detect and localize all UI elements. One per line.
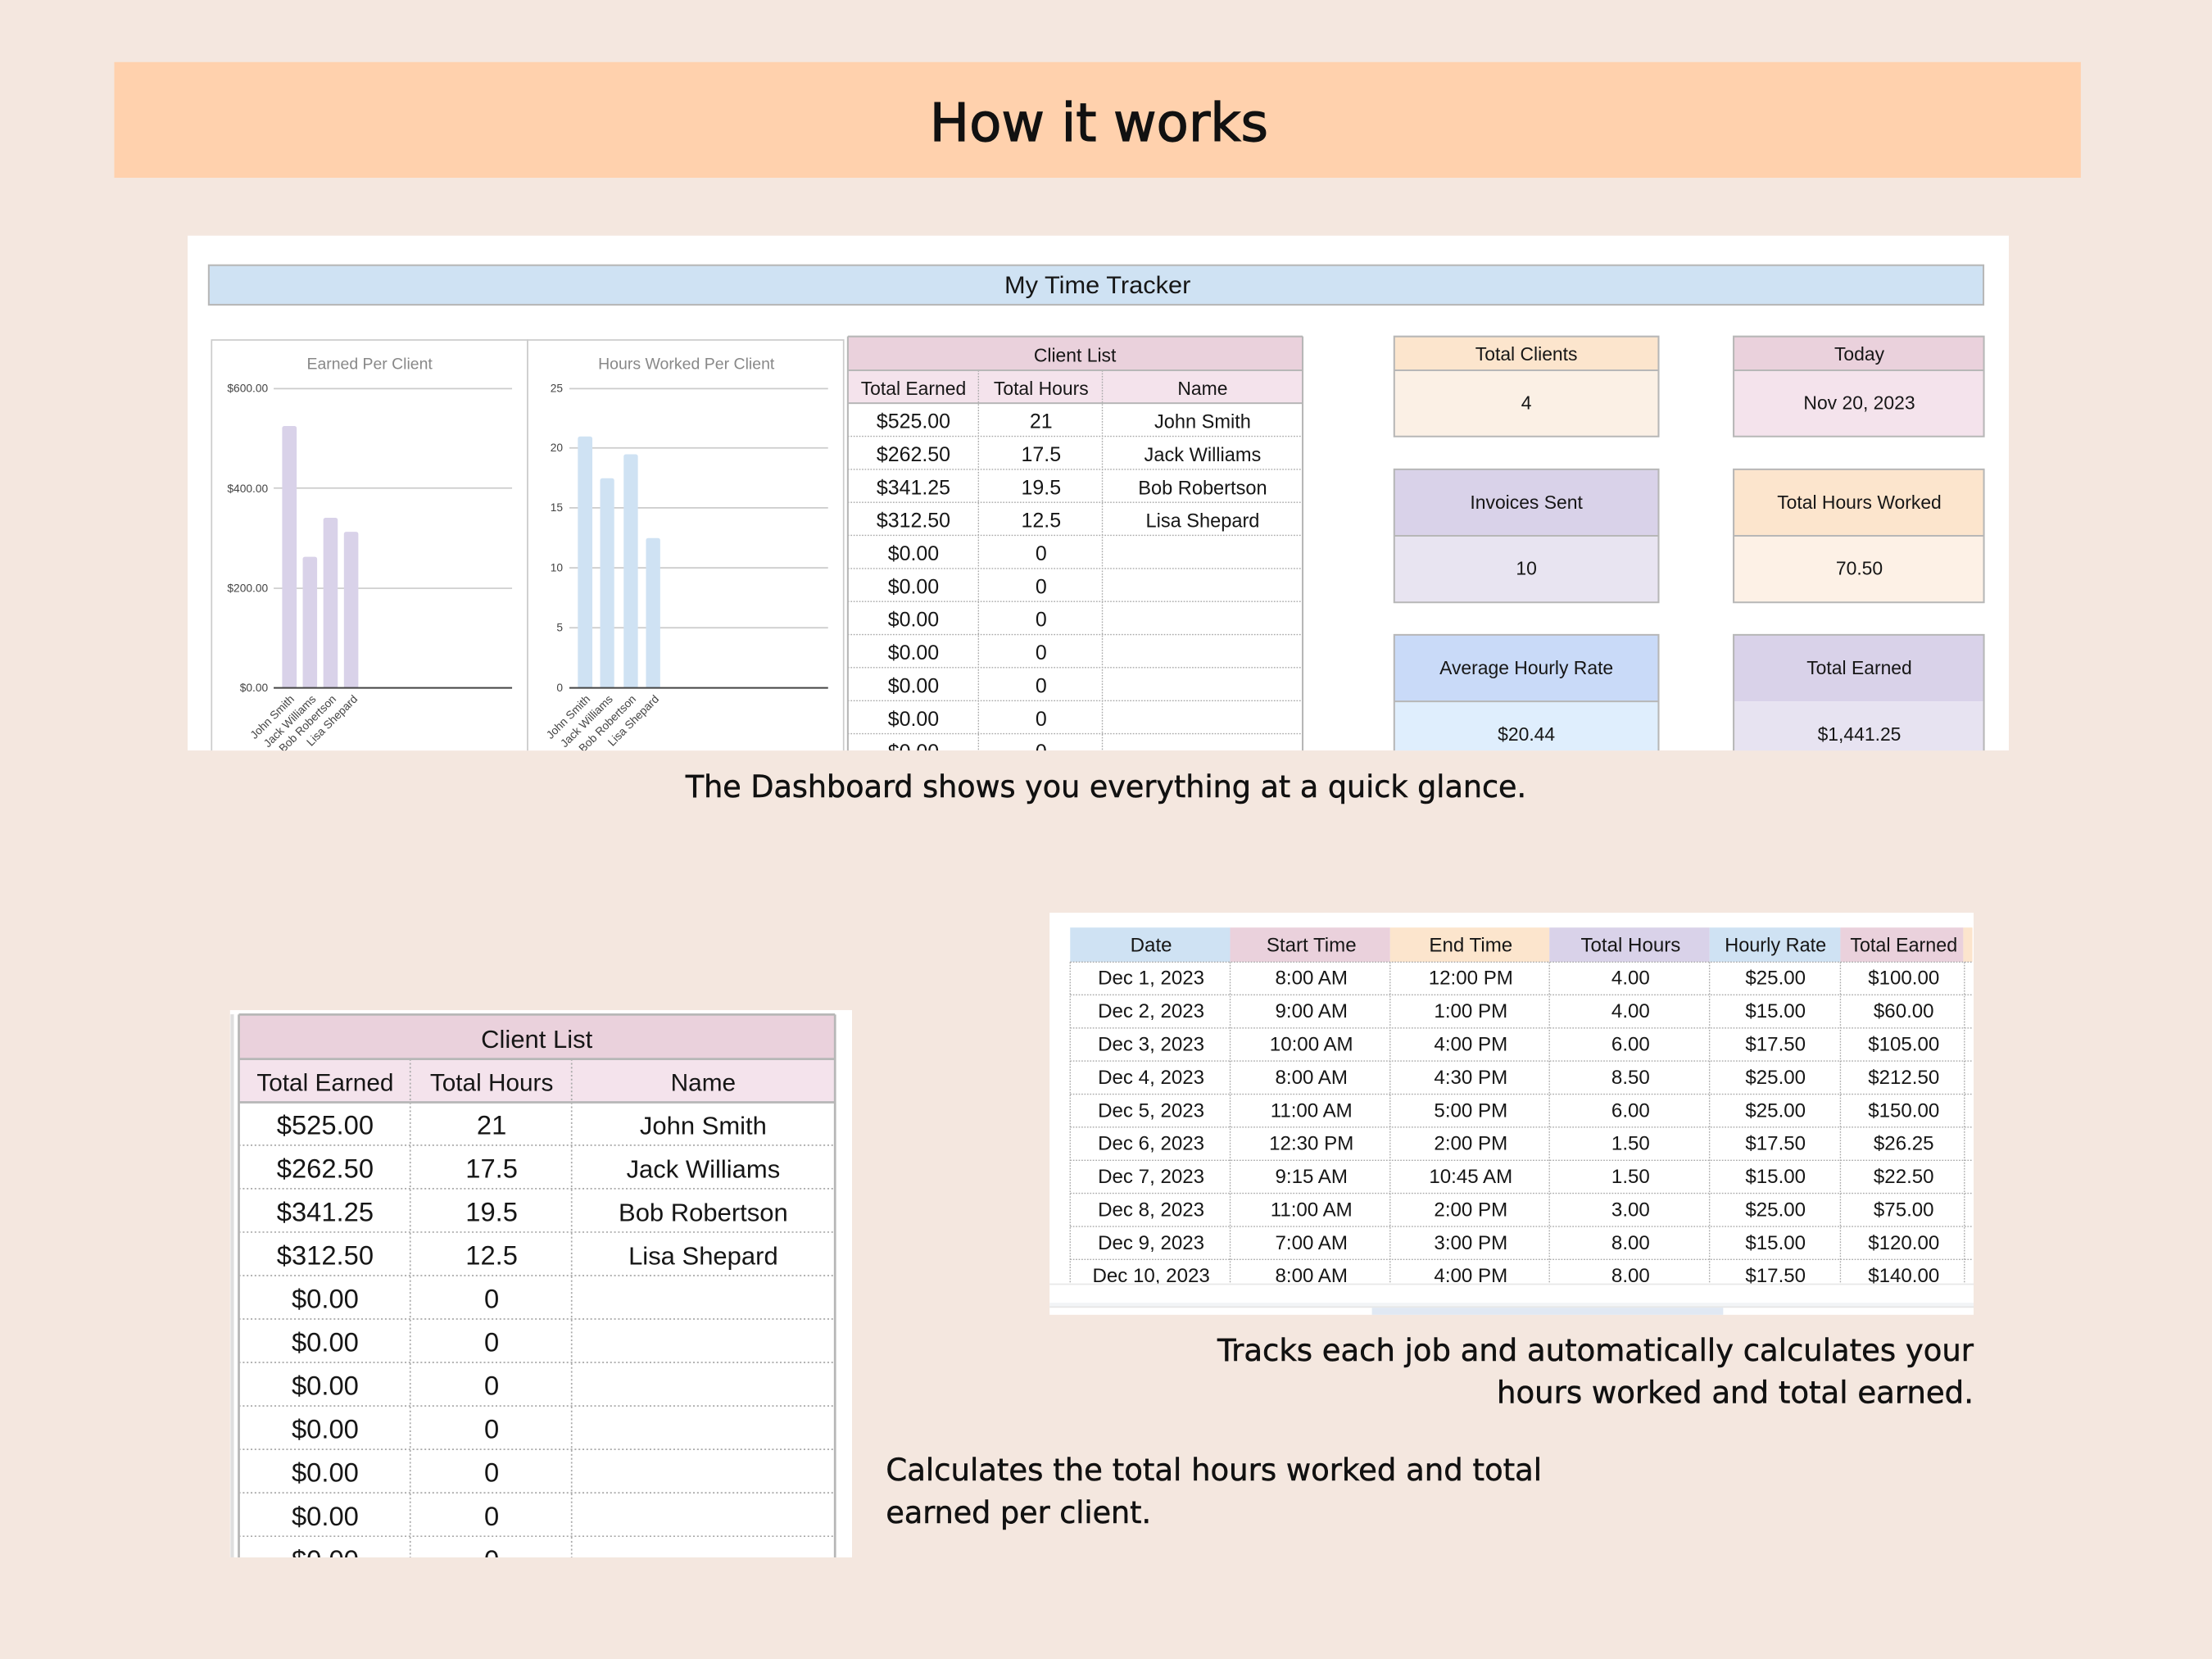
table: job log: Total Hours — [1580, 935, 1680, 957]
table: dashboard client list: $0.00 — [888, 741, 939, 764]
stat card: today: Today — [1834, 343, 1885, 365]
bar chart: earned per client: $600.00 — [227, 383, 269, 395]
table: dashboard client list: Jack Williams — [1145, 444, 1261, 465]
table: job log: $120.00 — [1868, 1232, 1939, 1254]
stat card: total clients — [1394, 337, 1658, 437]
table: job log: $75.00 — [1874, 1199, 1934, 1221]
table: job log: 2:00 PM — [1434, 1199, 1507, 1221]
panel: client list screenshot — [230, 1010, 852, 1575]
bar chart: earned per client: Earned Per Client — [307, 355, 433, 373]
table: dashboard client list: $525.00 — [877, 410, 950, 433]
bar chart: hours worked per client: 20 — [551, 442, 563, 454]
table: dashboard client list: $312.50 — [877, 510, 950, 533]
table: client list: 0 — [484, 1457, 499, 1488]
table: client list: 0 — [484, 1414, 499, 1444]
table: dashboard client list: John Smith — [1154, 411, 1251, 433]
table: client list: 17.5 — [465, 1153, 518, 1183]
table: client list: John Smith — [640, 1111, 767, 1140]
bar chart: hours worked per client — [528, 340, 844, 764]
table: job log: 3.00 — [1611, 1199, 1650, 1221]
table: client list: Bob Robertson — [619, 1199, 788, 1227]
table: dashboard client list: Lisa Shepard — [1145, 510, 1259, 532]
table: client list: $262.50 — [277, 1153, 374, 1183]
panel: time log screenshot — [1049, 913, 1974, 1315]
table: client list: $525.00 — [277, 1109, 374, 1140]
caption: dashboard: The Dashboard shows you everything at a quick glance. — [685, 769, 1526, 805]
heading: My Time Tracker: My Time Tracker — [1004, 273, 1191, 299]
bar chart: earned per client — [211, 340, 528, 764]
stat card: total clients: 4 — [1521, 392, 1532, 413]
bar chart: hours worked per client: Jack Williams — [558, 693, 615, 750]
table: job log: 8.00 — [1611, 1232, 1650, 1254]
stat card: total earned — [1734, 635, 1984, 765]
table: client list: 0 — [484, 1284, 499, 1314]
stat card: today: Nov 20, 2023 — [1803, 392, 1915, 413]
table: job log: $212.50 — [1868, 1067, 1939, 1089]
stat card: average hourly rate: Average Hourly Rate — [1439, 657, 1613, 678]
table: dashboard client list: 0 — [1036, 575, 1047, 598]
table: job log: 6.00 — [1611, 1099, 1650, 1122]
table: job log: $17.50 — [1745, 1034, 1806, 1056]
table: client list — [239, 1014, 835, 1575]
table: job log: 12:30 PM — [1269, 1133, 1353, 1155]
bar chart: hours worked per client: John Smith — [544, 693, 592, 741]
table: job log: Dec 7, 2023 — [1098, 1166, 1204, 1188]
table: dashboard client list: $0.00 — [888, 708, 939, 731]
stat card: total clients: Total Clients — [1475, 343, 1577, 365]
table: job log: 2:00 PM — [1434, 1133, 1507, 1155]
table: dashboard client list: Name — [1177, 378, 1227, 399]
table: dashboard client list: Bob Robertson — [1138, 477, 1267, 498]
bar chart: earned per client: Jack Williams — [261, 693, 319, 750]
table: client list: $0.00 — [292, 1544, 359, 1575]
table: job log: 6.00 — [1611, 1034, 1650, 1056]
table: job log: 7:00 AM — [1276, 1232, 1348, 1254]
caption: job tracking: Tracks each job and automatically calculates your — [1217, 1333, 1974, 1368]
stat card: invoices sent: 10 — [1516, 558, 1537, 579]
table: dashboard client list: $341.25 — [877, 476, 950, 499]
table: job log — [1070, 927, 1973, 1287]
table: job log: $15.00 — [1745, 1166, 1806, 1188]
table: client list: $0.00 — [292, 1414, 359, 1444]
table: client list: 0 — [484, 1544, 499, 1575]
table: job log: 1.50 — [1611, 1166, 1650, 1188]
table: job log: $17.50 — [1745, 1265, 1806, 1287]
bar chart: hours worked per client: 0 — [556, 682, 563, 694]
table: client list: 0 — [484, 1371, 499, 1401]
table: dashboard client list: $262.50 — [877, 443, 950, 466]
table: job log: 10:00 AM — [1270, 1034, 1353, 1056]
table: job log: $17.50 — [1745, 1133, 1806, 1155]
table: dashboard client list: $0.00 — [888, 674, 939, 697]
table: client list: $0.00 — [292, 1501, 359, 1531]
table: job log: End Time — [1429, 935, 1512, 957]
title banner — [114, 62, 2081, 178]
table: job log: 3:00 PM — [1434, 1232, 1507, 1254]
table: job log: 1:00 PM — [1434, 1000, 1507, 1022]
table: client list: Name — [671, 1070, 736, 1097]
table: job log: $22.50 — [1874, 1166, 1934, 1188]
stat card: total hours worked: 70.50 — [1836, 558, 1883, 579]
table: client list: 0 — [484, 1501, 499, 1531]
table: client list: $0.00 — [292, 1457, 359, 1488]
table: job log: Hourly Rate — [1725, 935, 1826, 957]
table: job log: 10:45 AM — [1429, 1166, 1512, 1188]
table: dashboard client list: $0.00 — [888, 609, 939, 632]
bar chart: earned per client: John Smith — [248, 693, 297, 741]
table: dashboard client list: $0.00 — [888, 575, 939, 598]
bar chart: earned per client: $200.00 — [227, 582, 269, 594]
table: job log: 5:00 PM — [1434, 1099, 1507, 1122]
table: job log: 1.50 — [1611, 1133, 1650, 1155]
table: job log: 8:00 AM — [1276, 1265, 1348, 1287]
table: job log: 4:00 PM — [1434, 1034, 1507, 1056]
caption: client totals: Calculates the total hours worked and total — [886, 1453, 1542, 1488]
table: job log: Dec 2, 2023 — [1098, 1000, 1204, 1022]
table: job log: Dec 6, 2023 — [1098, 1133, 1204, 1155]
bar chart: earned per client: Bob Robertson — [277, 693, 338, 755]
panel: dashboard screenshot — [188, 236, 2009, 765]
table: job log: 8:00 AM — [1276, 968, 1348, 990]
table: client list: 19.5 — [465, 1197, 518, 1227]
bar chart: hours worked per client: Hours Worked Per Client — [598, 355, 775, 373]
bar chart: hours worked per client: 25 — [551, 383, 563, 395]
table: client list: Lisa Shepard — [628, 1242, 778, 1271]
table: job log: $26.25 — [1874, 1133, 1934, 1155]
table: client list: Jack Williams — [627, 1154, 780, 1183]
table: job log: Dec 4, 2023 — [1098, 1067, 1204, 1089]
bar chart: hours worked per client: 5 — [556, 622, 563, 634]
table: client list: $0.00 — [292, 1327, 359, 1358]
table: job log: $60.00 — [1874, 1000, 1934, 1022]
scrollbar — [1049, 1303, 1974, 1315]
table: job log: Date — [1131, 935, 1172, 957]
table: job log: 11:00 AM — [1271, 1199, 1353, 1221]
table: client list: 0 — [484, 1327, 499, 1358]
table: dashboard client list: 0 — [1036, 542, 1047, 565]
table: job log: Dec 1, 2023 — [1098, 968, 1204, 990]
table: job log: 9:15 AM — [1276, 1166, 1348, 1188]
table: client list: $341.25 — [277, 1197, 374, 1227]
stat card: total earned: $1,441.25 — [1818, 723, 1901, 745]
stat card: invoices sent: Invoices Sent — [1470, 492, 1583, 513]
table: dashboard client list: 0 — [1036, 741, 1047, 764]
table: job log: Dec 5, 2023 — [1098, 1099, 1204, 1122]
table: job log: Dec 8, 2023 — [1098, 1199, 1204, 1221]
table: job log: $25.00 — [1745, 1067, 1806, 1089]
table: dashboard client list: 0 — [1036, 641, 1047, 664]
caption: client totals — [886, 1453, 1542, 1530]
table: job log: Dec 9, 2023 — [1098, 1232, 1204, 1254]
table: job log: $150.00 — [1868, 1099, 1939, 1122]
table: dashboard client list: Client List — [1034, 345, 1117, 366]
table: job log: $100.00 — [1868, 968, 1939, 990]
table: job log: 12:00 PM — [1429, 968, 1513, 990]
table: client list: 12.5 — [465, 1240, 518, 1271]
title: How it works — [930, 93, 1268, 154]
table: job log: 8.00 — [1611, 1265, 1650, 1287]
bar chart: hours worked per client: 15 — [551, 501, 563, 514]
table: job log: Total Earned — [1850, 935, 1957, 957]
table: dashboard client list: 17.5 — [1022, 443, 1061, 466]
bar chart: earned per client: $400.00 — [227, 483, 269, 495]
table: dashboard client list: $0.00 — [888, 641, 939, 664]
table: dashboard client list: Total Hours — [994, 378, 1089, 399]
table: job log: 4:00 PM — [1434, 1265, 1507, 1287]
table: dashboard client list: $0.00 — [888, 542, 939, 565]
bar chart: earned per client: $0.00 — [240, 682, 269, 694]
table: job log: 4.00 — [1611, 968, 1650, 990]
stat card: total hours worked: Total Hours Worked — [1777, 492, 1942, 513]
table: client list: $0.00 — [292, 1371, 359, 1401]
heading: My Time Tracker — [209, 265, 1983, 305]
table: job log: 8:00 AM — [1276, 1067, 1348, 1089]
stat card: invoices sent — [1394, 469, 1658, 602]
table: client list: 21 — [477, 1109, 506, 1140]
table: dashboard client list: 12.5 — [1022, 510, 1061, 533]
table: job log: $25.00 — [1745, 1199, 1806, 1221]
table: job log: $140.00 — [1868, 1265, 1939, 1287]
table: job log: Start Time — [1267, 935, 1357, 957]
stat card: total hours worked — [1734, 469, 1984, 602]
caption: job tracking: hours worked and total earned. — [1497, 1375, 1974, 1410]
bar chart: hours worked per client: Lisa Shepard — [605, 693, 661, 749]
table: client list: $312.50 — [277, 1240, 374, 1271]
table: job log: 4:30 PM — [1434, 1067, 1507, 1089]
bar chart: hours worked per client: Bob Robertson — [577, 693, 638, 755]
table: dashboard client list: Total Earned — [861, 378, 966, 399]
table: job log: $25.00 — [1745, 1099, 1806, 1122]
caption: client totals: earned per client. — [886, 1495, 1151, 1530]
stat card: today — [1734, 337, 1984, 437]
table: job log: Dec 3, 2023 — [1098, 1034, 1204, 1056]
table: dashboard client list — [848, 337, 1303, 764]
table: job log: 4.00 — [1611, 1000, 1650, 1022]
table: client list: $0.00 — [292, 1284, 359, 1314]
table: client list: Total Hours — [430, 1070, 553, 1097]
stat card: total earned: Total Earned — [1806, 657, 1912, 678]
table: client list: Total Earned — [256, 1070, 393, 1097]
stat card: average hourly rate — [1394, 635, 1658, 765]
table: dashboard client list: 0 — [1036, 674, 1047, 697]
caption: job tracking — [1217, 1333, 1974, 1410]
bar chart: earned per client: Lisa Shepard — [304, 693, 360, 749]
table: job log: $15.00 — [1745, 1000, 1806, 1022]
table: job log: 9:00 AM — [1276, 1000, 1348, 1022]
table: dashboard client list: 21 — [1030, 410, 1053, 433]
table: job log: $15.00 — [1745, 1232, 1806, 1254]
stat card: average hourly rate: $20.44 — [1498, 723, 1555, 745]
table: dashboard client list: 19.5 — [1022, 476, 1061, 499]
table: job log: $25.00 — [1745, 968, 1806, 990]
bar chart: hours worked per client: 10 — [551, 561, 563, 573]
table: job log: $105.00 — [1868, 1034, 1939, 1056]
table: dashboard client list: 0 — [1036, 708, 1047, 731]
table: client list: Client List — [481, 1025, 593, 1054]
table: job log: Dec 10, 2023 — [1092, 1265, 1210, 1287]
table: job log: 8.50 — [1611, 1067, 1650, 1089]
table: job log: 11:00 AM — [1271, 1099, 1353, 1122]
table: dashboard client list: 0 — [1036, 609, 1047, 632]
